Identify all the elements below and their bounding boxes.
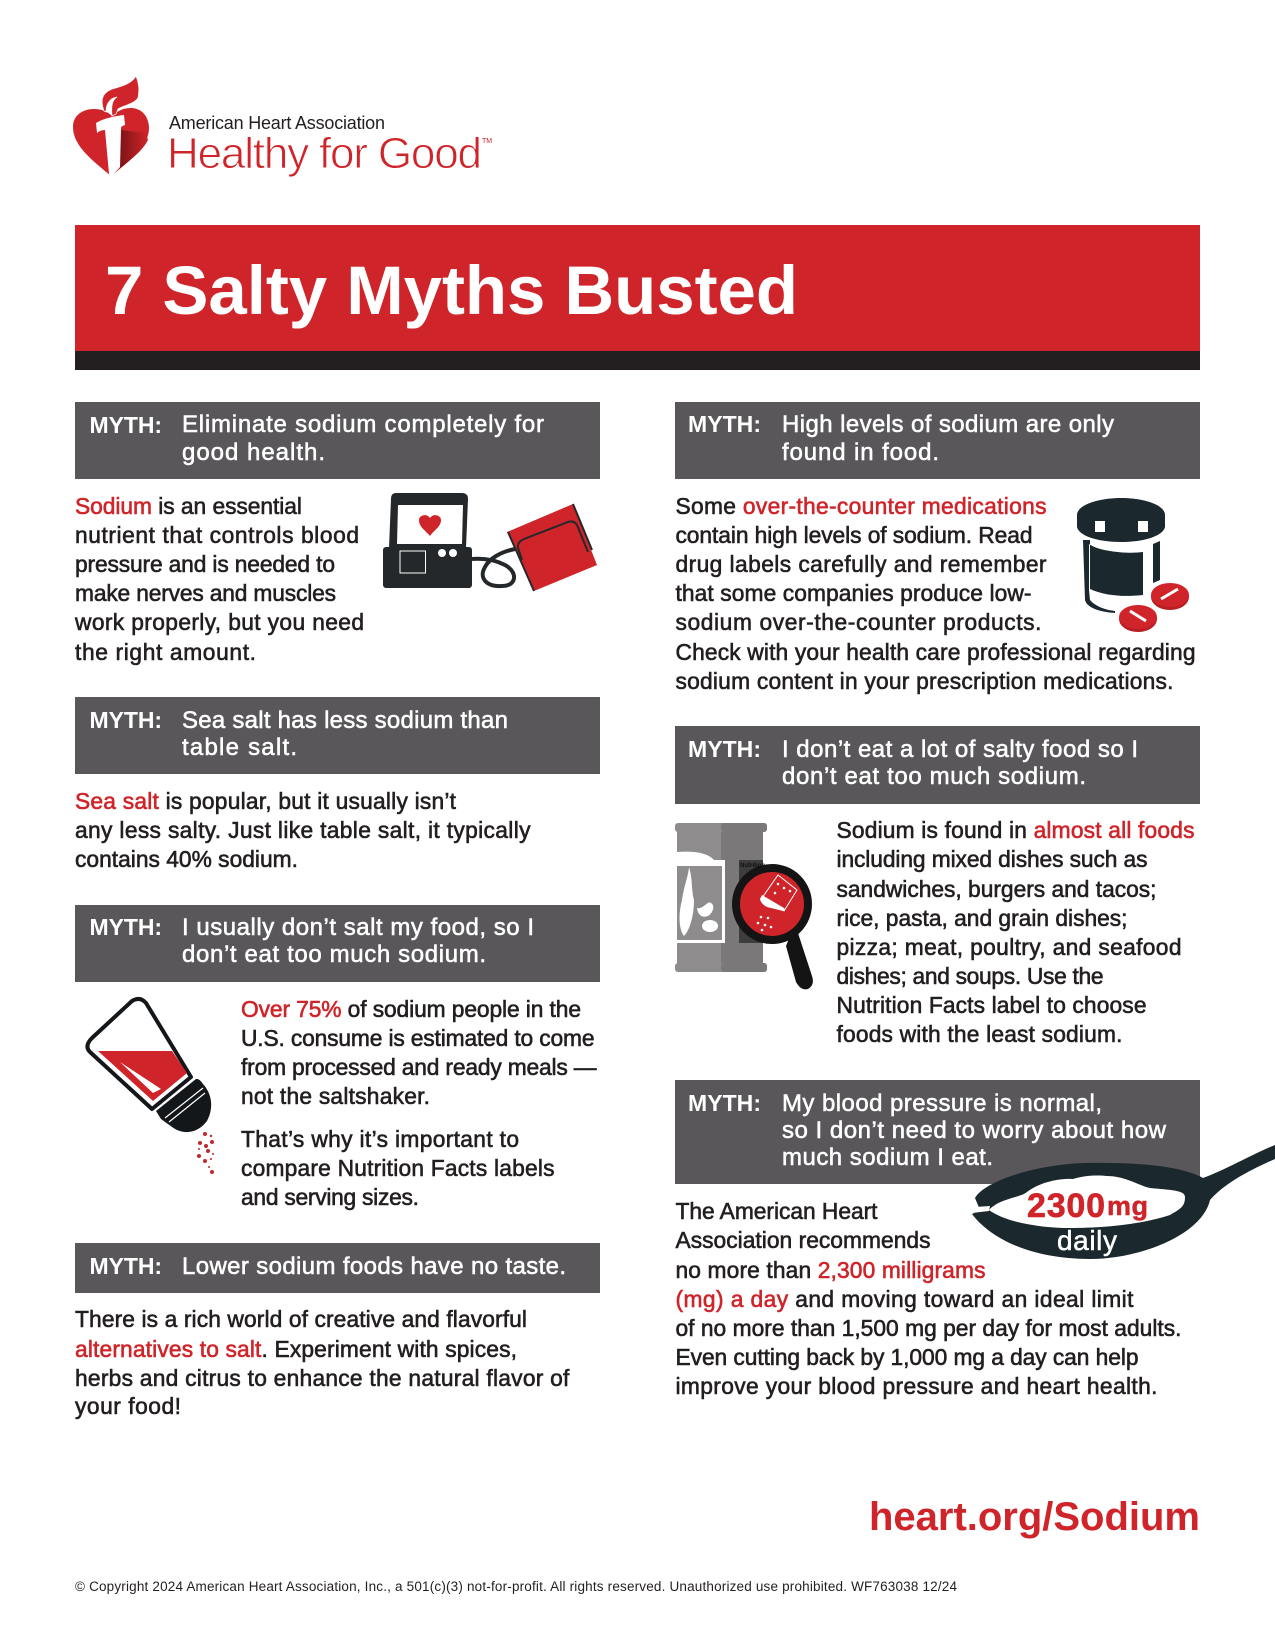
body text: sodium content in your prescription medications. [676, 668, 1174, 694]
body text [74, 493, 364, 665]
body text: dishes; and soups. Use the [836, 963, 1104, 989]
body text: work properly, but you need [74, 609, 364, 635]
copyright footer: © Copyright 2024 American Heart Association, Inc., a 501(c)(3) not-for-profit. All rights reserved. Unauthorized use prohibited. WF763038 12/24 [75, 1579, 957, 1594]
body text: herbs and citrus to enhance the natural flavor of [75, 1365, 570, 1391]
myth heading bar: Lower sodium foods have no taste. [182, 1253, 566, 1280]
body text: foods with the least sodium. [836, 1021, 1122, 1047]
body text: the right amount. [75, 639, 256, 665]
icon: food can with magnifying glass: Nutrition [740, 863, 765, 869]
body text: pressure and is needed to [75, 551, 335, 577]
body text [75, 788, 531, 872]
body text: not the saltshaker. [241, 1083, 430, 1109]
icon: spoon with salt [972, 1145, 1275, 1259]
body text: drug labels carefully and remember [676, 551, 1047, 577]
myth heading bar: I don’t eat a lot of salty food so I [782, 736, 1138, 763]
panel: myth 6 [675, 726, 1200, 1047]
myth heading bar [75, 402, 600, 479]
myth heading bar: MYTH: [90, 914, 162, 940]
body text: make nerves and muscles [75, 580, 336, 606]
spoon amount: 2300 [1027, 1187, 1105, 1225]
body text: from processed and ready meals — [241, 1054, 597, 1080]
title banner [75, 225, 1200, 370]
organization name: American Heart Association [169, 113, 385, 133]
icon: food can with magnifying glass [675, 823, 813, 989]
body text: Even cutting back by 1,000 mg a day can help [676, 1344, 1138, 1370]
myth heading bar: Eliminate sodium completely for [182, 411, 544, 438]
myth heading bar: table salt. [182, 734, 297, 761]
body text: Association recommends [676, 1227, 930, 1253]
myth heading bar: MYTH: [688, 1090, 761, 1116]
body text: improve your blood pressure and heart health. [676, 1373, 1158, 1399]
body text: any less salty. Just like table salt, it typically [75, 817, 531, 843]
myth heading bar: I usually don’t salt my food, so I [182, 914, 534, 941]
myth heading bar [675, 726, 1200, 804]
body text: The American Heart [676, 1198, 878, 1224]
spoon daily label: daily [1057, 1225, 1117, 1256]
myth heading bar: MYTH: [90, 412, 162, 438]
panel: myth 3 [75, 905, 600, 1210]
body text: that some companies produce low- [676, 580, 1032, 606]
myth heading bar: MYTH: [90, 1253, 162, 1279]
myth heading bar: good health. [182, 439, 325, 466]
panel: myth 2 [75, 697, 600, 872]
myth heading bar: found in food. [782, 439, 939, 466]
myth heading bar [75, 697, 600, 774]
panel: myth 1 [74, 402, 600, 665]
myth heading bar [75, 1243, 600, 1293]
myth heading bar: much sodium I eat. [782, 1144, 993, 1171]
body text: Nutrition Facts label to choose [836, 992, 1146, 1018]
website link: heart.org/Sodium [869, 1495, 1200, 1539]
myth heading bar: My blood pressure is normal, [782, 1090, 1102, 1117]
body text: Sodium is found in almost all foods [836, 817, 1194, 843]
body text [676, 1198, 1182, 1399]
icon: salt shaker [87, 999, 214, 1174]
myth heading bar: so I don’t need to worry about how [782, 1117, 1167, 1144]
body text: Sea salt is popular, but it usually isn’t [75, 788, 457, 814]
body text: Sodium is an essential [75, 493, 302, 519]
body text: U.S. consume is estimated to come [241, 1025, 594, 1051]
panel: myth 5 [675, 402, 1200, 694]
body text: sandwiches, burgers and tacos; [836, 876, 1156, 902]
myth heading bar: MYTH: [688, 736, 761, 762]
spoon amount: mg [1107, 1191, 1148, 1221]
myth heading bar [675, 1080, 1200, 1184]
body text: rice, pasta, and grain dishes; [836, 905, 1128, 931]
body text: contains 40% sodium. [75, 846, 298, 872]
myth heading bar: High levels of sodium are only [782, 411, 1114, 438]
logo [73, 76, 492, 178]
icon: medicine bottle and pills [1077, 498, 1189, 632]
body text [241, 996, 597, 1210]
body text: compare Nutrition Facts labels [241, 1155, 554, 1181]
body text: Some over-the-counter medications [676, 493, 1046, 519]
body text: Check with your health care professional regarding [676, 639, 1196, 665]
body text: Over 75% of sodium people in the [241, 996, 581, 1022]
logo wordmark: Healthy for Good [167, 129, 482, 178]
body text: sodium over-the-counter products. [676, 609, 1042, 635]
myth heading bar: MYTH: [90, 707, 162, 733]
myth heading bar: don’t eat too much sodium. [182, 941, 486, 968]
panel: myth 7 [675, 1080, 1275, 1399]
myth heading bar [75, 905, 600, 982]
body text: (mg) a day and moving toward an ideal limit [676, 1286, 1134, 1312]
myth heading bar [675, 402, 1200, 479]
body text [836, 817, 1194, 1047]
panel: myth 4 [75, 1243, 600, 1419]
body text: contain high levels of sodium. Read [676, 522, 1032, 548]
body text: That’s why it’s important to [241, 1126, 519, 1152]
body text: your food! [75, 1393, 181, 1419]
myth heading bar: Sea salt has less sodium than [182, 707, 508, 734]
body text: There is a rich world of creative and flavorful [75, 1306, 527, 1332]
title: 7 Salty Myths Busted [105, 252, 798, 329]
body text: nutrient that controls blood [75, 522, 359, 548]
body text [75, 1306, 570, 1419]
body text: including mixed dishes such as [836, 846, 1148, 872]
trademark: TM [482, 138, 492, 145]
myth heading bar: don’t eat too much sodium. [782, 763, 1086, 790]
body text: and serving sizes. [241, 1184, 419, 1210]
icon: blood pressure monitor [383, 493, 597, 591]
myth heading bar: MYTH: [688, 411, 761, 437]
body text: of no more than 1,500 mg per day for most adults. [676, 1315, 1182, 1341]
body text: no more than 2,300 milligrams [676, 1257, 986, 1283]
body text [676, 493, 1196, 694]
body text: alternatives to salt. Experiment with spices, [75, 1336, 517, 1362]
icon: heart and torch [73, 76, 149, 177]
spoon amount [1027, 1187, 1148, 1225]
body text: pizza; meat, poultry, and seafood [836, 934, 1182, 960]
